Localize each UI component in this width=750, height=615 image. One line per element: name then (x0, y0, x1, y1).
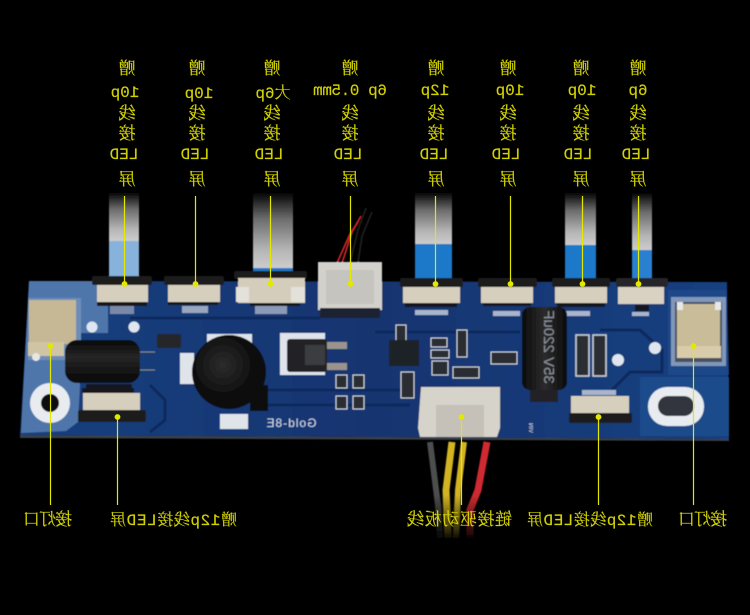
label: connector 2: 赠 (188, 54, 206, 79)
right lamp connector (671, 297, 726, 366)
label: connector 5 (420, 54, 449, 190)
label: connector 8: 6p (628, 82, 648, 100)
label: connector 5: 赠 (428, 54, 444, 79)
label: connector 2: 线 (188, 99, 206, 124)
label: connector 8: 线 (630, 99, 646, 124)
left lamp connector (28, 298, 81, 361)
label: connector 8: 接 (630, 119, 646, 144)
board left light end (21, 281, 108, 433)
label: connector 3: 屏 (264, 165, 280, 190)
ribbon cables (109, 192, 652, 280)
label: connector 4: 线 (342, 99, 358, 124)
label: connector 3: 线 (264, 99, 280, 124)
label: connector 2: 接 (188, 119, 206, 144)
IC (389, 340, 419, 366)
label: connector 1 (110, 54, 139, 190)
small LED pads (86, 322, 661, 366)
label: connector 7: 屏 (572, 165, 590, 190)
bottom left connector (78, 388, 146, 422)
top connector 3 (234, 271, 307, 314)
label: right lamp port: 接灯口 (678, 505, 727, 530)
white component pads (180, 333, 325, 429)
label: connector 7: 10p (568, 82, 596, 100)
label: driver board cable: 链接驱动板线 (407, 505, 512, 530)
label: connector 8: 屏 (630, 165, 646, 190)
label: connector 3: LED (255, 146, 283, 164)
output resistors (576, 335, 606, 376)
wires to white connector (337, 208, 372, 263)
left capacitor (65, 340, 155, 390)
label: connector 3 (255, 54, 291, 190)
label: connector 6: 接 (500, 119, 516, 144)
label: connector 2: LED (181, 146, 209, 164)
mounting slot right (648, 387, 704, 426)
label: connector 7: 线 (572, 99, 590, 124)
label: connector 7: 赠 (572, 54, 590, 79)
label: connector 4: 赠 (342, 54, 358, 79)
label: connector 5: 12p (421, 82, 449, 100)
label: connector 8: 赠 (630, 54, 646, 79)
label: connector 4: 6p 0.5mm (313, 82, 387, 100)
silkscreen: pin names: VIN (527, 423, 533, 433)
mounting hole left (30, 383, 70, 423)
label: connector 3: 赠 (264, 54, 280, 79)
label: connector 2: 屏 (188, 165, 206, 190)
top connector 5 (478, 278, 537, 316)
inductor (192, 335, 268, 411)
board right light end (668, 290, 729, 375)
label: bottom right ribbon: 赠12p线接LED屏 (527, 511, 653, 530)
label: connector 7: LED (564, 146, 592, 164)
transistor small (157, 334, 181, 348)
label: connector 6: LED (492, 146, 520, 164)
label: connector 1: 10p (111, 84, 139, 102)
label: connector 7 (564, 54, 596, 190)
label: connector 1: 屏 (118, 165, 136, 190)
label: connector 4 (313, 54, 387, 190)
label: connector 4: 接 (342, 119, 358, 144)
label: connector 8 (622, 54, 650, 190)
label: connector 3: 大6p (255, 84, 291, 103)
label: connector 4: LED (334, 146, 362, 164)
label: connector 5: LED (420, 146, 448, 164)
label lines: top (122, 196, 641, 286)
label: connector 1: 线 (118, 99, 136, 124)
board (20, 281, 729, 439)
bottom white connector with wires (418, 387, 500, 538)
label: connector 6: 线 (500, 99, 516, 124)
label: connector 7: 接 (572, 119, 590, 144)
label: connector 5: 线 (428, 99, 444, 124)
label: connector 6: 屏 (500, 165, 516, 190)
label: bottom left ribbon: 赠12p线接LED屏 (110, 511, 237, 530)
right capacitor: 35V 220uF (540, 310, 557, 384)
label: connector 1: 接 (118, 119, 136, 144)
small resistors left group (336, 375, 364, 409)
label: connector 2 (181, 54, 213, 190)
label: connector 5: 接 (428, 119, 444, 144)
top connector 2 (164, 276, 224, 313)
label lines: bottom (48, 344, 696, 505)
label: connector 2: 10p (185, 85, 213, 103)
MOSFET (287, 339, 347, 372)
label: connector 3: 接 (264, 119, 280, 144)
bottom right connector (569, 390, 632, 423)
label: connector 5: 屏 (428, 165, 444, 190)
traces (130, 318, 662, 432)
top connector 4 (400, 278, 463, 315)
label: connector 4: 屏 (342, 165, 358, 190)
photo: driver board (20, 192, 729, 550)
small resistors centre group (396, 325, 517, 398)
right capacitor (522, 307, 567, 402)
label: connector 1: LED (110, 146, 138, 164)
wire fade out (420, 495, 490, 550)
label: connector 8: LED (622, 146, 650, 164)
silkscreen: board name: Gold-8E (265, 416, 317, 430)
white power connector (318, 262, 382, 318)
label: connector 1: 赠 (118, 54, 136, 79)
label: connector 6 (492, 54, 524, 190)
top connector 6 (552, 278, 610, 316)
label: left lamp port: 接灯口 (23, 505, 72, 530)
label: connector 6: 10p (496, 82, 524, 100)
label: connector 6: 赠 (500, 54, 516, 79)
top connector 1 (92, 276, 152, 314)
top connector 7 (616, 278, 668, 316)
